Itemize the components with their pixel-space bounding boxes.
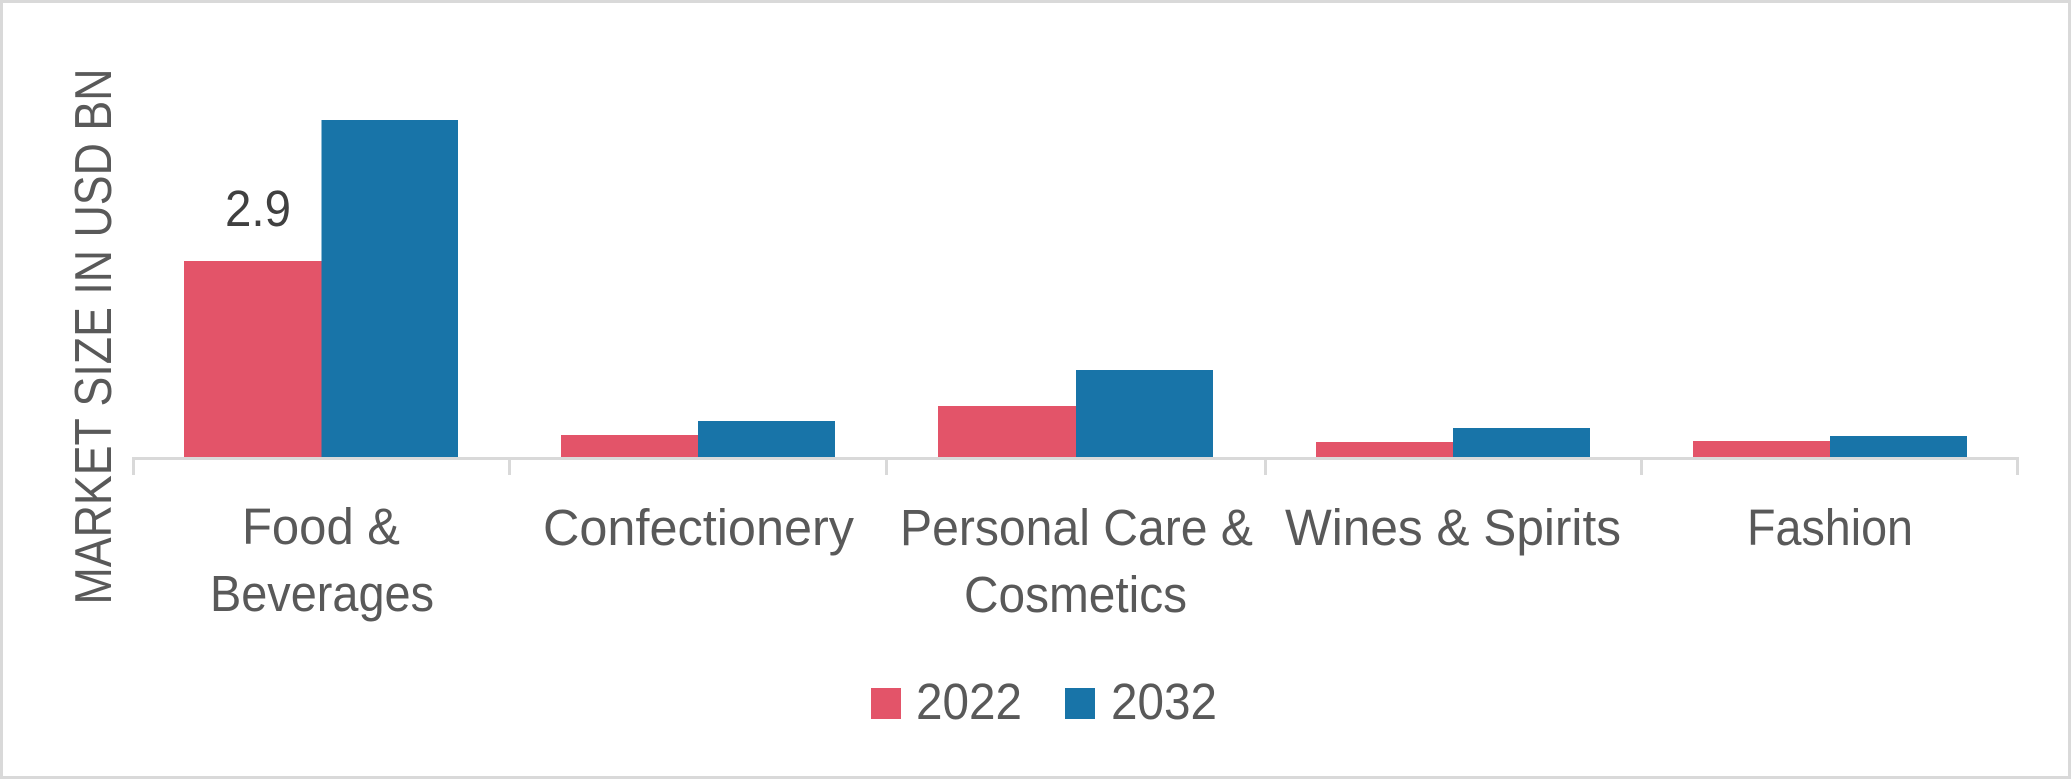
category label: Confectionery: Confectionery	[543, 499, 854, 556]
category label: Food & Beverages: Food &	[242, 498, 400, 555]
category label: Fashion: Fashion	[1747, 499, 1913, 556]
category label: Personal Care & Cosmetics: Personal Care &	[900, 499, 1253, 556]
category label: Personal Care & Cosmetics: Cosmetics	[964, 566, 1187, 623]
data label: 2.9: 2.9	[225, 180, 291, 237]
bars: Wines & Spirits	[1316, 428, 1590, 457]
legend item: 2022	[871, 673, 1022, 730]
bars: Food & Beverages	[184, 120, 458, 457]
legend item: 2032: 2032	[1111, 673, 1217, 730]
legend item: 2032	[1065, 673, 1217, 730]
category label: Food & Beverages: Beverages	[210, 565, 434, 622]
category label: Wines & Spirits: Wines & Spirits	[1285, 499, 1621, 556]
x axis	[132, 457, 2019, 475]
bars: Confectionery	[561, 421, 835, 457]
y-axis title: MARKET SIZE IN USD BN	[65, 68, 123, 604]
category label: Personal Care & Cosmetics	[900, 499, 1253, 623]
bar chart	[132, 120, 2019, 475]
bars: Fashion	[1693, 436, 1967, 457]
legend	[871, 673, 1217, 730]
category label: Food & Beverages	[210, 498, 434, 622]
bars: Personal Care & Cosmetics	[938, 370, 1213, 457]
legend item: 2022: 2022	[916, 673, 1022, 730]
